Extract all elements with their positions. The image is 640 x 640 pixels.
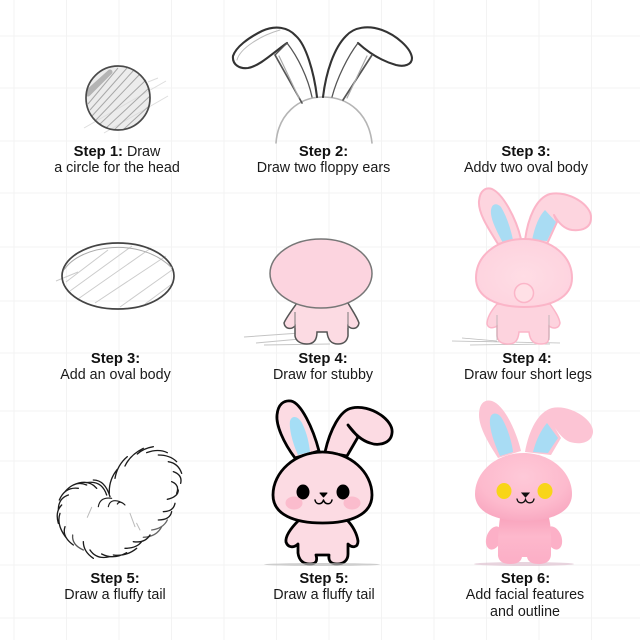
caption: step 3 middle: Add an oval body [60,367,172,383]
caption: step 6: Step 6: [501,571,550,587]
caption: step 2: Draw two floppy ears [257,160,390,176]
caption: step 3 top: Addv two oval body [464,160,589,176]
caption: step 5 left: Step 5: [90,571,140,587]
caption: step 4 middle: Draw for stubby [273,367,374,383]
caption: step 1: Step 1: Draw [74,144,160,160]
icon: rabbit head with ears, tail and legs, pale [452,188,591,345]
icon: outlined cartoon bunny [273,401,392,564]
caption: step 6: Add facial features [466,587,584,603]
caption: step 1: a circle for the head [54,160,180,176]
icon: two floppy ears sketch [233,27,412,143]
caption: step 4 right: Step 4: [502,351,552,367]
icon: oval body sketch [56,243,174,309]
shadow under cartoon bunny [264,563,380,566]
caption: step 3 middle: Step 3: [91,351,140,367]
caption: step 3 top: Step 3: [501,144,551,160]
caption: step 2: Step 2: [299,144,348,160]
icon: 3D pink bunny [474,401,593,566]
caption: step 4 right: Draw four short legs [464,367,592,383]
caption: step 6: and outline [490,604,560,620]
icon: fluffy tail sketch [57,447,182,558]
caption: step 5 middle: Draw a fluffy tail [273,587,375,603]
caption: step 5 middle: Step 5: [299,571,349,587]
caption: step 4 middle: Step 4: [298,351,348,367]
caption: step 5 left: Draw a fluffy tail [64,587,166,603]
icon: shaded head circle [84,66,168,133]
icon: pink head and stubby legs sketch [244,239,372,345]
